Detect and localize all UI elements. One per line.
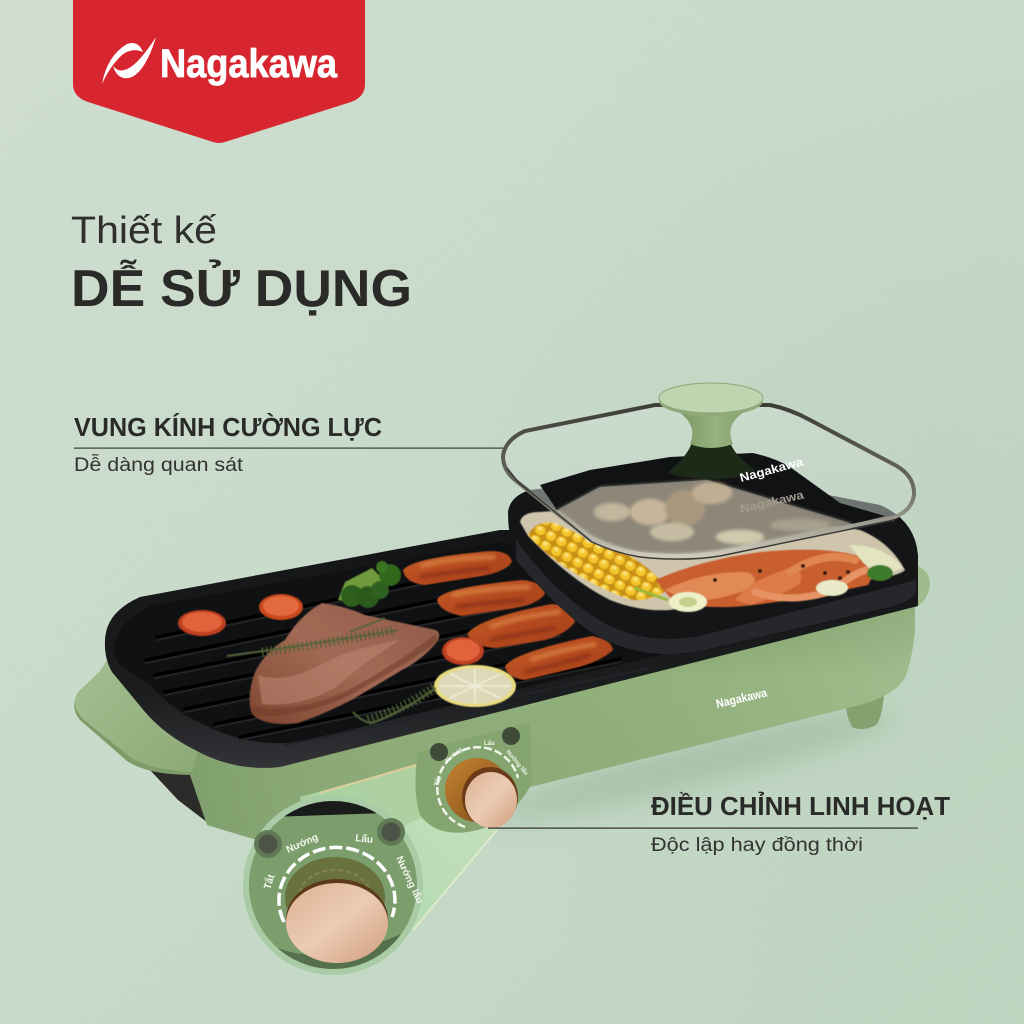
control panel: Nướng	[444, 747, 464, 765]
indicator lights	[430, 743, 448, 761]
callout: glass lid: Dễ dàng quan sát	[74, 454, 244, 476]
control panel: Nướng lẩu	[504, 749, 530, 777]
broccoli	[338, 561, 401, 608]
dial dashes close-up	[279, 847, 395, 922]
brand banner	[73, 0, 365, 143]
glass pane	[503, 405, 914, 556]
dial labels close-up: Tắt	[260, 872, 278, 891]
heading	[71, 210, 412, 318]
brand name: Nagakawa	[160, 42, 338, 86]
light beam from knob to magnifier	[300, 760, 497, 970]
icon: Nagakawa logo swirl	[102, 37, 156, 84]
tomato slices	[178, 594, 484, 665]
hot pot contents	[520, 500, 905, 612]
product: electric grill and hot pot	[74, 383, 930, 860]
ground shadow	[481, 693, 899, 837]
rosemary sprig	[353, 688, 436, 723]
control panel	[415, 722, 532, 833]
heading: Thiết kế	[71, 210, 217, 252]
grill tray	[105, 530, 918, 768]
shadow under left side	[150, 770, 212, 826]
control panel: Lẩu	[484, 740, 495, 747]
corn	[528, 522, 668, 600]
steak	[250, 603, 439, 724]
green base	[190, 598, 915, 860]
big knob	[285, 857, 388, 963]
callout: glass lid	[74, 412, 504, 476]
glass lid	[503, 383, 914, 559]
lid rim	[503, 405, 914, 556]
callout: flexible control: ĐIỀU CHỈNH LINH HOẠT	[651, 791, 950, 821]
magnifier: control dial close-up: Nướng	[285, 832, 320, 856]
small knob	[445, 758, 509, 822]
right foot	[846, 695, 884, 729]
pot rim seen through glass	[540, 453, 885, 524]
callout: flexible control	[488, 791, 950, 856]
lemon slice	[434, 665, 516, 707]
right side handle	[915, 565, 930, 608]
dial markings	[437, 747, 518, 827]
magnifier: control dial close-up: Lẩu	[355, 832, 374, 846]
brand reflection: Nagakawa	[739, 488, 805, 516]
dial labels: Tắt	[431, 774, 444, 788]
brand on body: Nagakawa	[715, 686, 769, 711]
chicken wings	[403, 551, 613, 680]
indicator lights close-up	[254, 830, 282, 858]
magnifier: control dial close-up: Nướng lẩu	[393, 854, 426, 906]
hot pot	[508, 470, 918, 654]
leek and vegetables	[634, 545, 903, 612]
left handle	[74, 655, 200, 774]
heading: DỄ SỬ DỤNG	[71, 259, 412, 318]
clams seen through glass	[557, 480, 853, 554]
brand on lid: Nagakawa	[738, 454, 805, 485]
rosemary on steak	[227, 618, 398, 656]
magnifier: control dial close-up	[243, 795, 426, 985]
lid knob	[659, 383, 763, 479]
grilled food	[178, 551, 613, 724]
callout: flexible control: Độc lập hay đồng thời	[651, 835, 863, 856]
callout: glass lid: VUNG KÍNH CƯỜNG LỰC	[74, 412, 382, 442]
grill plate surface	[114, 541, 680, 743]
grill ribs	[146, 566, 650, 745]
shrimps	[655, 550, 871, 607]
